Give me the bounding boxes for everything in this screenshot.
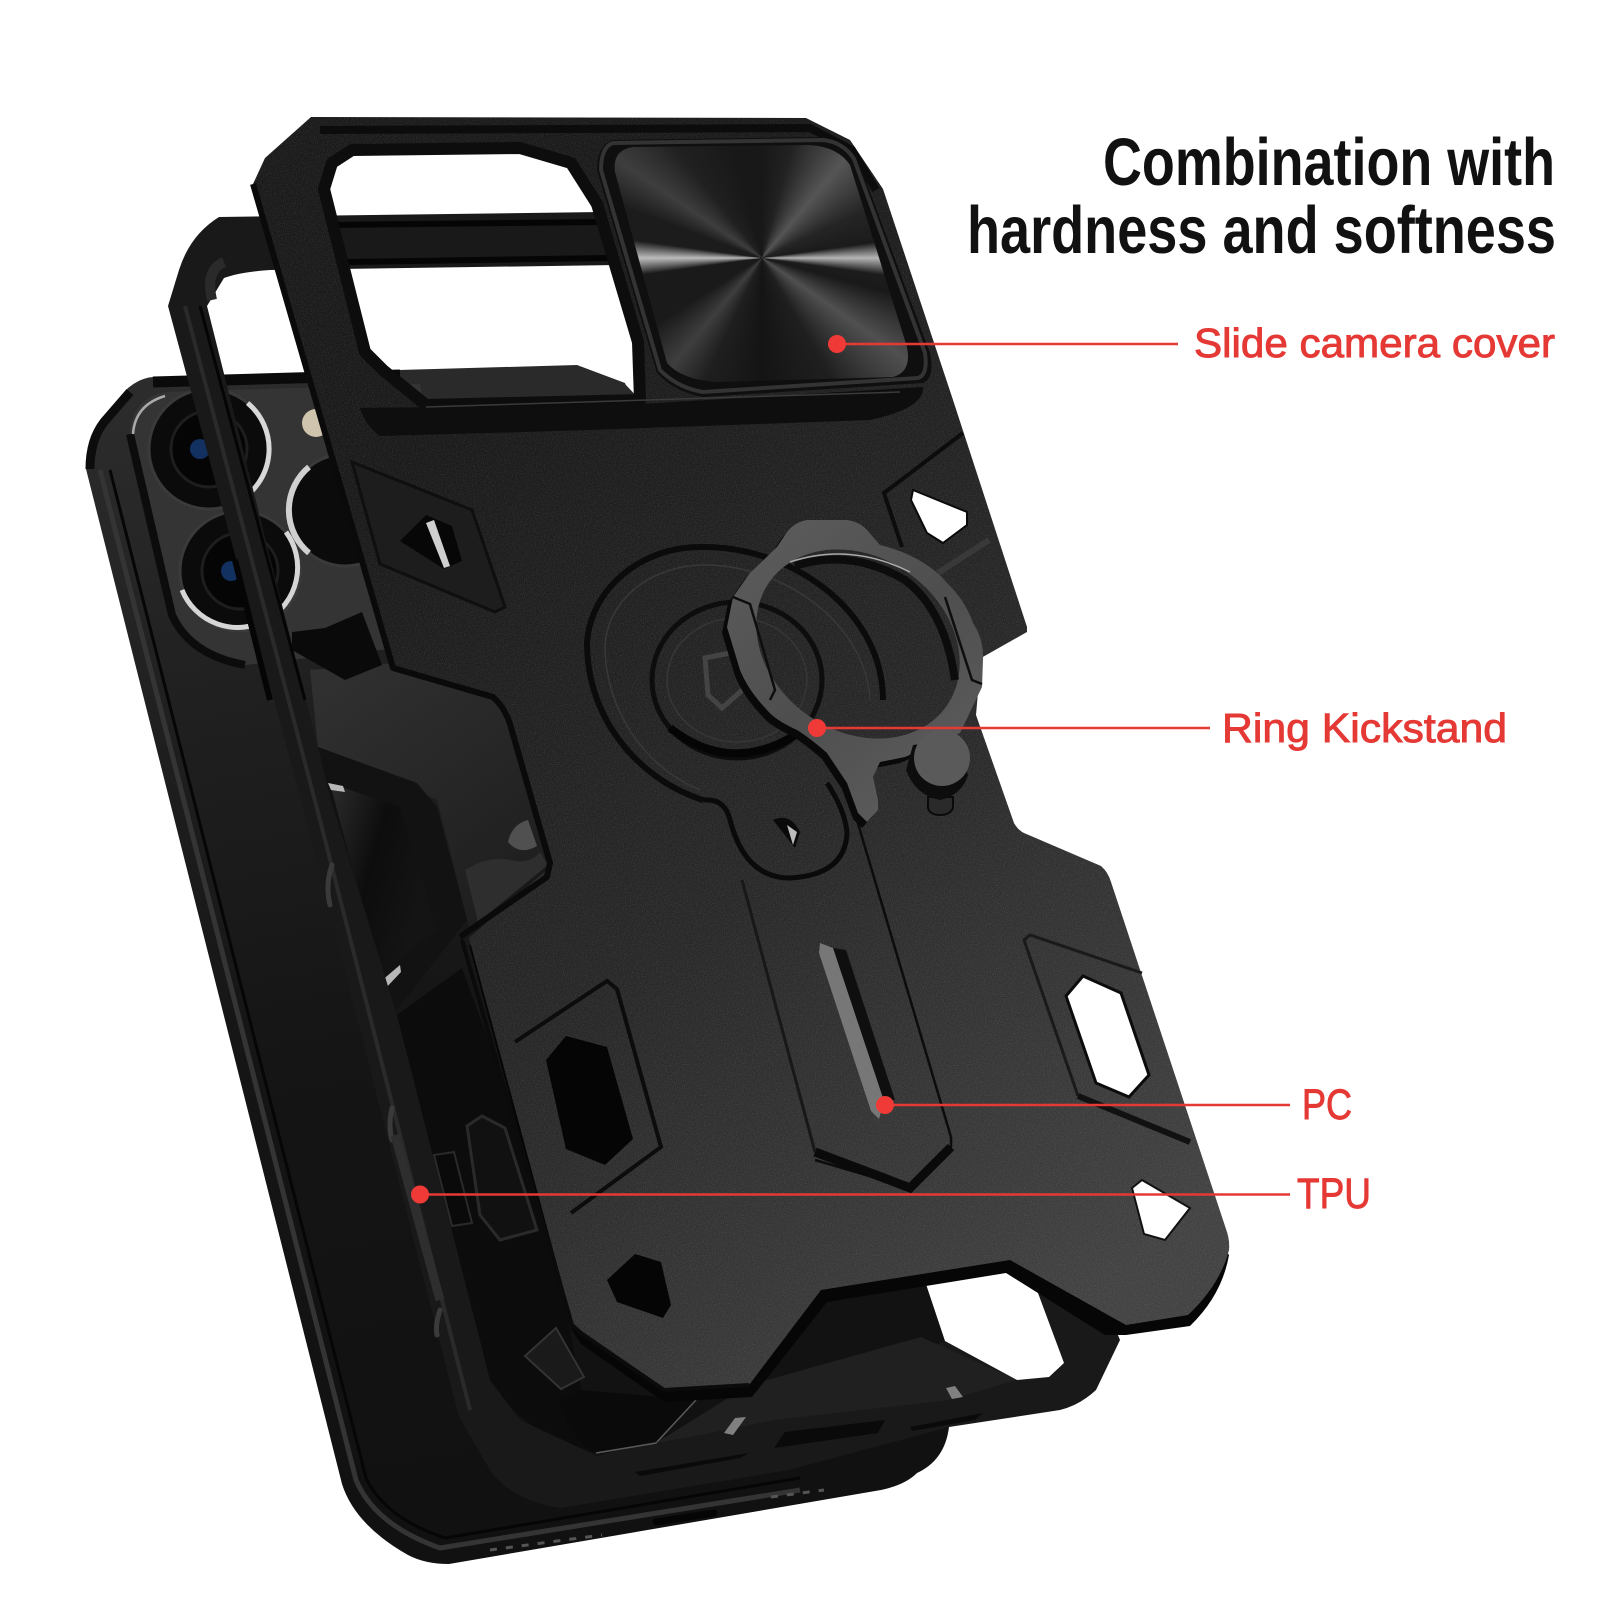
callout: ring kickstand: Ring Kickstand — [1222, 705, 1507, 751]
glass reflection panel — [310, 663, 550, 930]
silver frame tabs — [724, 1386, 963, 1435]
lower lobe — [703, 783, 847, 878]
slide camera cover — [597, 137, 931, 397]
ring inner wall — [795, 560, 955, 680]
lens one — [149, 389, 269, 509]
callout: TPU — [411, 1170, 1371, 1218]
pivot hook — [928, 797, 953, 815]
plate texture — [240, 110, 1240, 1410]
logo shield — [705, 650, 748, 708]
callout: PC — [876, 1081, 1352, 1129]
vertical slit — [819, 943, 895, 1119]
ring kickstand — [722, 520, 983, 828]
TPU frame — [168, 212, 1120, 1508]
callout: slide camera cover — [828, 320, 1555, 366]
lower left hex panel — [515, 981, 661, 1213]
pivot button — [906, 730, 970, 800]
recess window — [330, 783, 437, 973]
bottom right hole — [1132, 1180, 1190, 1240]
title — [967, 125, 1556, 268]
ring shadow edge — [722, 526, 978, 828]
bottom frame band — [656, 1337, 1017, 1443]
upper right hex panel — [884, 433, 989, 573]
top rim — [320, 128, 876, 190]
window frame — [324, 148, 640, 405]
callout: ring kickstand — [808, 705, 1507, 751]
reflection on phone back — [508, 820, 537, 850]
recess frame — [318, 747, 467, 1017]
plate edge rim — [253, 184, 550, 937]
side button — [395, 1135, 440, 1300]
ring seams — [733, 597, 982, 700]
upper clip — [292, 612, 382, 680]
bottom band under window — [360, 387, 923, 436]
phone top edge seen through window — [400, 367, 642, 407]
ring face — [727, 520, 983, 822]
inner panels behind the case — [292, 612, 594, 1453]
product illustration: phone with two-part case — [86, 117, 1230, 1564]
charging port — [656, 1513, 714, 1522]
inner circle — [652, 602, 822, 758]
camera module — [130, 384, 470, 665]
bottom left hole — [607, 1254, 671, 1318]
inner lip shadow at bottom of the plate — [469, 945, 1229, 1402]
callout: PC: PC — [1302, 1081, 1352, 1129]
bottom slots — [635, 1413, 983, 1476]
callout: slide camera cover: Slide camera cover — [1194, 320, 1555, 366]
ring base keyhole disc — [587, 547, 883, 800]
silver tabs — [328, 783, 401, 990]
phone body — [86, 365, 949, 1564]
brushed metal camera slider — [614, 145, 908, 382]
bottom inner recess — [560, 1390, 696, 1453]
upper left hex panel — [352, 462, 505, 612]
lobe screw — [773, 818, 800, 848]
PC plate — [240, 110, 1240, 1410]
lower right hex panel — [1024, 935, 1190, 1142]
raised slider panel — [742, 800, 951, 1188]
lens three — [180, 511, 300, 631]
frame bumps — [328, 865, 440, 1335]
side clip — [434, 1116, 537, 1240]
callout: TPU: TPU — [1297, 1170, 1371, 1218]
lower clip — [525, 1328, 584, 1389]
lens two — [289, 454, 401, 566]
speaker holes — [490, 1490, 824, 1550]
